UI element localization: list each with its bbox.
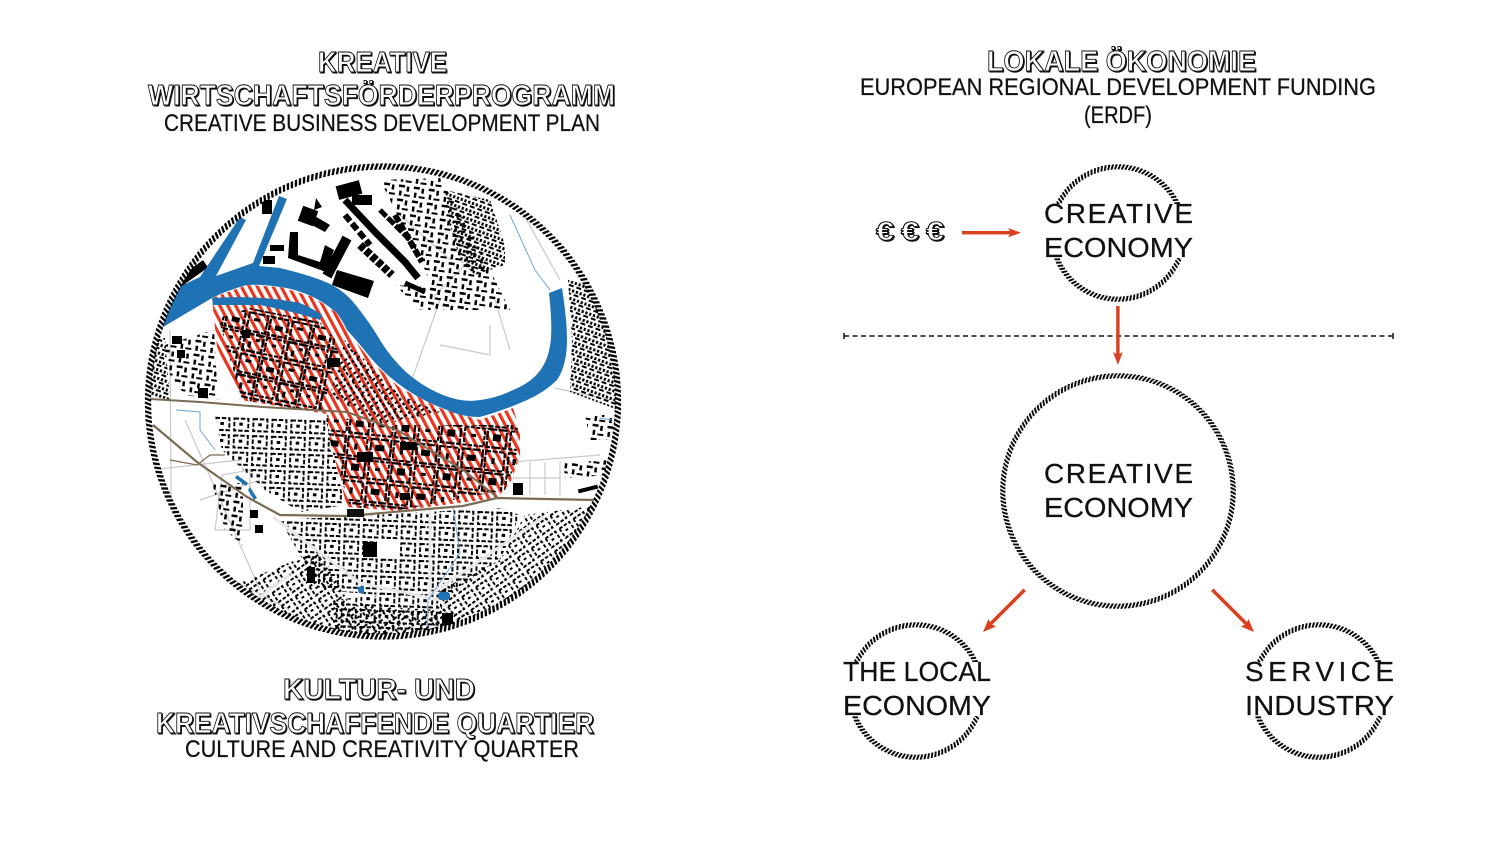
subtitle: European Regional Development Funding xyxy=(860,74,1376,129)
arrow: funding to creative economy xyxy=(962,228,1021,237)
icon: three euro symbols: € xyxy=(926,216,944,246)
map area: white open plot xyxy=(377,542,398,556)
icon: three euro symbols: € xyxy=(902,217,920,247)
map area: red hatched culture and creativity quarter xyxy=(212,285,520,511)
subtitle: creative business development plan: CREATIVE BUSINESS DEVELOPMENT PLAN xyxy=(164,110,600,137)
arrow: to the local economy xyxy=(983,588,1026,632)
map area: railway lines xyxy=(150,399,595,516)
subtitle: European Regional Development Funding: EUROPEAN REGIONAL DEVELOPMENT FUNDING xyxy=(860,74,1376,101)
arrow: to service industry xyxy=(1211,588,1254,632)
node: the local economy: ECONOMY xyxy=(843,690,991,721)
title: Kreative Wirtschaftsförderprogramm: WIRTSCHAFTSFÖRDERPROGRAMM xyxy=(149,80,616,113)
title: Kreative Wirtschaftsförderprogramm: KREATIVE xyxy=(319,48,448,80)
map: city plan in hatched circle xyxy=(140,162,623,645)
icon: three euro symbols: € xyxy=(927,217,945,247)
node: creative economy (funding level) xyxy=(1040,163,1196,303)
heading: Kultur- und Kreativschaffende Quartier xyxy=(156,674,595,741)
heading: Kultur- und Kreativschaffende Quartier: KREATIVSCHAFFENDE QUARTIER xyxy=(157,709,595,741)
map area: urban building fabric xyxy=(148,178,620,645)
map ring xyxy=(143,162,623,641)
title: Kreative Wirtschaftsförderprogramm xyxy=(148,47,616,113)
title: Lokale Ökonomie: LOKALE ÖKONOMIE xyxy=(988,46,1257,79)
map area: main roads cut through the fabric xyxy=(256,510,544,602)
heading: Kultur- und Kreativschaffende Quartier: KREATIVSCHAFFENDE QUARTIER xyxy=(156,708,594,740)
node: creative economy (funding level): ECONOMY xyxy=(1044,232,1193,263)
node: service industry: INDUSTRY xyxy=(1245,690,1394,721)
subtitle: European Regional Development Funding: (ERDF) xyxy=(1084,102,1152,129)
map area: river and harbour xyxy=(140,196,567,600)
arrow: downward to central creative economy xyxy=(1113,306,1123,365)
icon: three euro symbols: € xyxy=(876,216,894,246)
title: Lokale Ökonomie: LOKALE ÖKONOMIE xyxy=(987,45,1256,78)
map area: railway station xyxy=(347,509,364,517)
divider: dashed line xyxy=(844,333,1393,339)
heading: Kultur- und Kreativschaffende Quartier: KULTUR- UND xyxy=(283,674,475,706)
icon: three euro symbols: € xyxy=(901,216,919,246)
icon: three euro symbols xyxy=(876,216,945,247)
subheading: culture and creativity quarter: CULTURE AND CREATIVITY QUARTER xyxy=(185,736,579,763)
node: central creative economy: CREATIVE xyxy=(1044,458,1193,489)
icon: three euro symbols: € xyxy=(877,217,895,247)
map area: light grey street network xyxy=(160,215,610,610)
map area: small blue canals xyxy=(176,215,612,627)
node: service industry: SERVICE xyxy=(1245,656,1394,687)
node: creative economy (funding level): CREATIVE xyxy=(1044,198,1193,229)
title: Kreative Wirtschaftsförderprogramm: KREATIVE xyxy=(318,47,447,79)
node: central creative economy xyxy=(999,372,1237,610)
node: the local economy xyxy=(838,621,996,761)
node: the local economy: THE LOCAL xyxy=(843,656,991,687)
title: Kreative Wirtschaftsförderprogramm: WIRTSCHAFTSFÖRDERPROGRAMM xyxy=(148,79,615,112)
node: service industry xyxy=(1240,621,1398,761)
heading: Kultur- und Kreativschaffende Quartier: KULTUR- UND xyxy=(284,675,476,707)
map area: large industrial buildings north of the river xyxy=(167,180,598,625)
node: central creative economy: ECONOMY xyxy=(1044,492,1193,523)
